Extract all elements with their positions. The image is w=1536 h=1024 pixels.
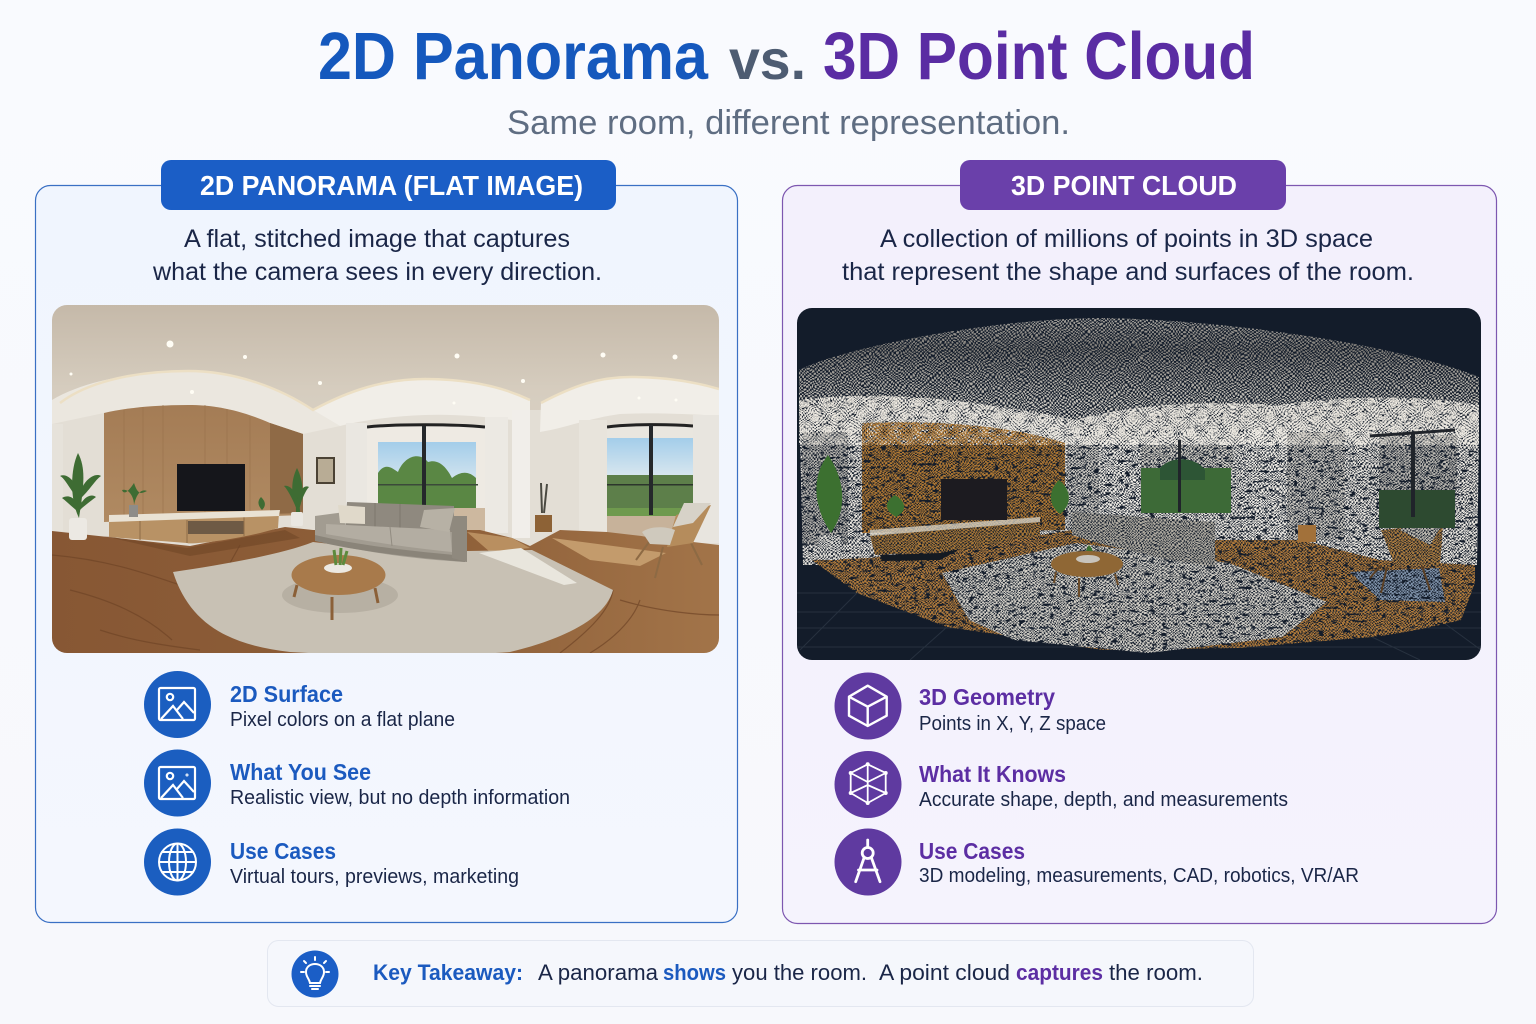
feature: use cases <box>834 828 1359 896</box>
plants <box>60 453 309 518</box>
feature: what you see: Realistic view, but no depth information <box>230 787 570 809</box>
title: 2D Panorama <box>318 19 709 94</box>
panel heading badge: 3D POINT CLOUD <box>1011 170 1237 201</box>
feature: use cases: 3D modeling, measurements, CAD, robotics, VR/AR <box>919 865 1359 887</box>
wall art <box>316 457 335 484</box>
feature: 3D geometry: 3D Geometry <box>919 684 1055 710</box>
panel: 2D panorama <box>36 160 738 922</box>
side table <box>535 483 552 532</box>
takeaway text: A point cloud <box>879 960 1010 985</box>
panel description: that represent the shape and surfaces of the room. <box>842 258 1414 286</box>
takeaway text: you the room. <box>732 960 867 985</box>
window with garden view <box>367 425 485 532</box>
point chair <box>1381 524 1443 566</box>
armchair legs <box>1370 565 1430 593</box>
feature: 2D surface: Pixel colors on a flat plane <box>230 709 455 731</box>
title <box>318 19 1255 94</box>
title: 3D Point Cloud <box>823 19 1255 94</box>
feature: what it knows: What It Knows <box>919 761 1066 787</box>
feature list: 3D <box>834 672 1359 896</box>
ceiling points <box>799 318 1479 445</box>
feature: 2D surface: 2D Surface <box>230 681 343 707</box>
floor <box>52 527 719 653</box>
window with balcony view <box>607 425 693 536</box>
side table <box>1298 525 1316 542</box>
panel description <box>152 225 602 286</box>
icon: light bulb <box>292 950 338 998</box>
title: vs. <box>729 28 806 91</box>
sofa <box>315 502 467 562</box>
panel: 3D point cloud <box>782 160 1496 924</box>
feature: what it knows: Accurate shape, depth, and measurements <box>919 789 1288 811</box>
feature: use cases: Virtual tours, previews, marketing <box>230 866 519 888</box>
point cloud plants <box>816 455 1093 560</box>
point plant pot <box>819 535 841 560</box>
point cloud tv <box>941 479 1007 520</box>
coffee table <box>292 548 386 620</box>
feature: what it knows <box>834 751 1288 818</box>
feature: 3D geometry <box>834 672 1106 740</box>
point cabinet <box>870 518 1040 555</box>
garden through windows <box>1141 430 1455 528</box>
feature: what you see <box>144 750 570 816</box>
panel heading badge <box>161 160 616 210</box>
takeaway text: A panorama <box>538 960 659 985</box>
panel description <box>842 225 1414 286</box>
ceiling lights <box>70 340 678 404</box>
armchair <box>636 503 711 578</box>
panorama room image <box>52 305 720 656</box>
takeaway text: captures <box>1016 960 1103 985</box>
panel description: A flat, stitched image that captures <box>184 225 570 253</box>
takeaway text: Key Takeaway: <box>373 960 523 985</box>
feature list: 2D <box>144 671 570 896</box>
curtains and column <box>346 415 719 543</box>
plant pots <box>69 505 303 540</box>
point sofa <box>1072 512 1215 567</box>
tv and media cabinet <box>109 464 280 543</box>
key takeaway callout <box>268 940 1254 1006</box>
subtitle: Same room, different representation. <box>507 104 1070 142</box>
feature: use cases <box>144 828 519 896</box>
feature: 3D geometry: Points in X, Y, Z space <box>919 713 1106 735</box>
takeaway text <box>373 960 1203 985</box>
point cloud room image <box>797 308 1481 660</box>
panel description: what the camera sees in every direction. <box>152 258 602 286</box>
takeaway text: shows <box>663 960 726 985</box>
feature: use cases: Use Cases <box>919 838 1025 864</box>
panel heading badge <box>960 160 1286 210</box>
feature: what you see: What You See <box>230 759 371 785</box>
rug <box>173 542 613 656</box>
feature: 2D surface <box>144 671 455 738</box>
walls and floor points <box>799 396 1479 653</box>
panel description: A collection of millions of points in 3D space <box>880 225 1373 253</box>
point cloud coffee table <box>1051 551 1123 597</box>
takeaway text: the room. <box>1109 960 1203 985</box>
feature: use cases: Use Cases <box>230 838 336 864</box>
panel heading badge: 2D PANORAMA (FLAT IMAGE) <box>200 170 583 201</box>
cabinet top and shadow <box>870 517 1040 561</box>
